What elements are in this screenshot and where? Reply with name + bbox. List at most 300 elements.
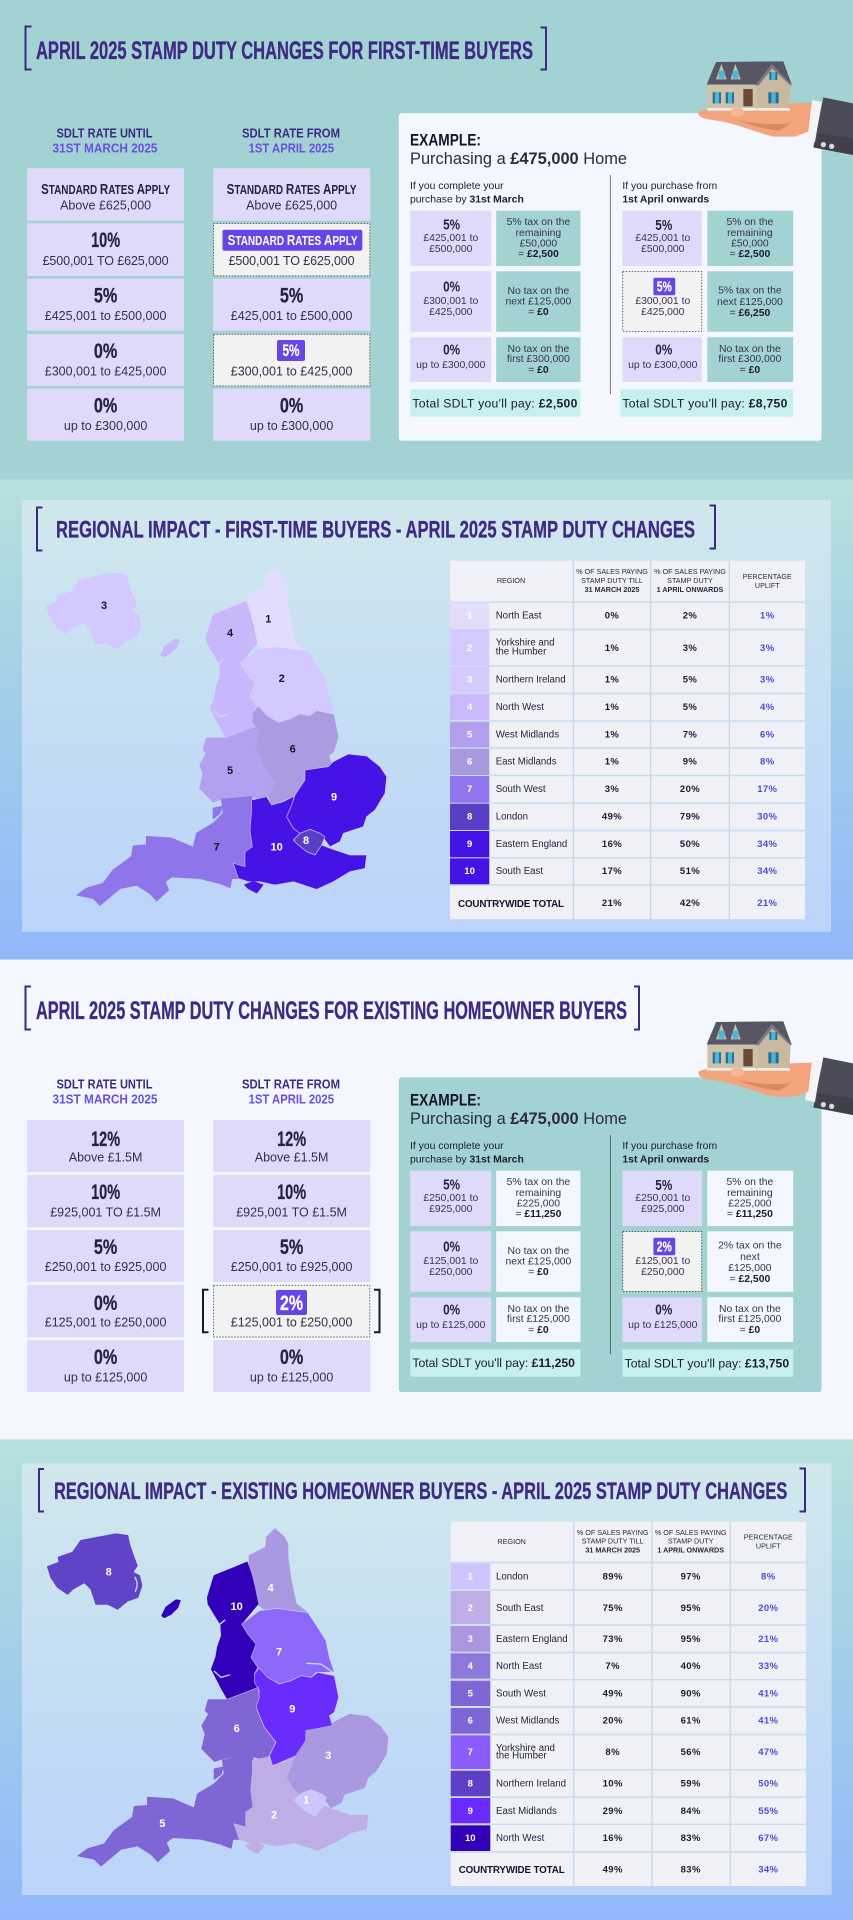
panel: worked example, existing homeowners: = £0 — [740, 1325, 760, 1336]
panel: SDLT rate from 1st April, existing homeowners: 10% — [277, 1181, 306, 1204]
map: existing homeowners by region: 10 — [231, 1601, 243, 1613]
panel: worked example, existing homeowners: = £11,250 — [515, 1209, 562, 1220]
table: first-time buyers by region: South West — [496, 784, 546, 795]
icon: hand holding house — [698, 61, 853, 155]
panel: worked example, first-time buyers: 5% — [657, 278, 672, 296]
panel: worked example, existing homeowners: £225,000 — [728, 1198, 772, 1210]
panel: worked example, existing homeowners: purchase by 31st March — [410, 1155, 524, 1166]
table: existing homeowners by region: 90% — [681, 1688, 701, 1700]
map: first-time buyers by region: 10 — [271, 842, 283, 854]
panel: worked example, existing homeowners: No tax on the — [507, 1246, 570, 1257]
table: first-time buyers by region: 49% — [602, 812, 622, 822]
table: existing homeowners by region: 7% — [605, 1661, 620, 1672]
table: existing homeowners by region: 9 — [468, 1806, 473, 1817]
panel: worked example, first-time buyers: next £125,000 — [717, 297, 783, 308]
table: first-time buyers by region: 2% — [683, 610, 697, 622]
panel: worked example, existing homeowners: £925,000 — [641, 1204, 685, 1215]
map: first-time buyers by region: 3 — [101, 600, 107, 612]
panel: worked example, first-time buyers: remaining — [727, 228, 773, 239]
panel: worked example, existing homeowners: up to £125,000 — [628, 1320, 698, 1331]
section background: first-time buyers — [0, 0, 853, 480]
panel: SDLT rate until 31st March, first-time buyers: £425,001 to £500,000 — [45, 309, 166, 323]
panel: worked example, existing homeowners: first £125,000 — [718, 1314, 782, 1325]
panel: SDLT rate from 1st April, first-time buyers: STANDARD RATES APPLY — [228, 232, 358, 249]
table: first-time buyers by region: 50% — [680, 839, 700, 850]
table: existing homeowners by region: 10% — [603, 1778, 623, 1790]
panel: worked example, first-time buyers: next £125,000 — [505, 296, 572, 308]
table: first-time buyers by region: East Midlands — [496, 756, 557, 768]
panel: SDLT rate from 1st April, first-time buyers: SDLT RATE FROM — [242, 125, 340, 140]
table: existing homeowners by region: 47% — [758, 1747, 779, 1758]
table: first-time buyers by region: 79% — [680, 812, 700, 822]
panel: worked example, existing homeowners: 1st April onwards — [622, 1155, 709, 1166]
panel: worked example, first-time buyers: Total SDLT you'll pay: £8,750 — [622, 396, 788, 410]
panel: SDLT rate until 31st March, existing homeowners: 5% — [94, 1236, 118, 1259]
panel: worked example, first-time buyers: £50,000 — [731, 238, 769, 250]
highlight chip: 2 percent — [276, 1290, 307, 1315]
section background: regional impact existing homeowners — [0, 1440, 853, 1920]
panel: worked example, existing homeowners: remaining — [516, 1188, 561, 1199]
table: first-time buyers by region: North West — [496, 702, 544, 713]
panel: worked example, existing homeowners: 5% on the — [727, 1177, 774, 1188]
heading: regional impact first-time buyers — [37, 506, 715, 550]
table: existing homeowners by region: 34% — [758, 1864, 779, 1876]
table: first-time buyers by region: 17% — [757, 784, 778, 795]
table: existing homeowners by region: 20% — [758, 1603, 779, 1614]
table: first-time buyers by region: 6% — [760, 730, 775, 740]
table: first-time buyers by region: South East — [496, 866, 543, 877]
table: existing homeowners by region: 41% — [758, 1688, 779, 1700]
panel: SDLT rate from 1st April, existing homeowners: 5% — [280, 1236, 304, 1259]
table: first-time buyers by region: 1% — [605, 674, 619, 686]
panel: worked example, existing homeowners: 0% — [443, 1238, 460, 1255]
table: first-time buyers by region: 34% — [757, 866, 778, 877]
panel: SDLT rate from 1st April, existing homeowners: £125,001 to £250,000 — [231, 1316, 352, 1330]
table: existing homeowners by region: 59% — [681, 1778, 701, 1790]
panel: worked example, first-time buyers: 0% — [655, 341, 672, 358]
map: first-time buyers by region: 4 — [227, 627, 234, 639]
panel: SDLT rate from 1st April, existing homeowners: £250,001 to £925,000 — [231, 1260, 352, 1274]
panel: SDLT rate until 31st March, existing homeowners: £125,001 to £250,000 — [45, 1316, 166, 1330]
panel: SDLT rate until 31st March, existing homeowners — [27, 1077, 184, 1392]
panel: regional impact first-time buyers — [22, 500, 831, 932]
panel: SDLT rate until 31st March, first-time buyers: SDLT RATE UNTIL — [56, 125, 153, 140]
panel: worked example, existing homeowners: up to £125,000 — [416, 1320, 486, 1331]
table: first-time buyers by region: Northern Ireland — [496, 674, 566, 686]
table: existing homeowners by region: 29% — [603, 1806, 623, 1817]
panel: worked example, existing homeowners: No tax on the — [719, 1304, 781, 1315]
table: first-time buyers by region — [450, 561, 805, 919]
table: first-time buyers by region: 30% — [757, 812, 778, 822]
panel: worked example, existing homeowners: first £125,000 — [507, 1314, 570, 1325]
panel: worked example, existing homeowners — [399, 1077, 822, 1392]
panel: SDLT rate from 1st April, existing homeowners: SDLT RATE FROM — [242, 1077, 340, 1092]
panel: worked example, existing homeowners: £250,001 to — [423, 1193, 478, 1204]
table: first-time buyers by region: 21% — [602, 898, 622, 909]
table: first-time buyers by region: 34% — [757, 839, 778, 850]
panel: worked example, existing homeowners: Total SDLT you'll pay: £13,750 — [625, 1356, 789, 1370]
map: existing homeowners by region: 1 — [303, 1795, 309, 1807]
table: existing homeowners by region: South East — [496, 1603, 544, 1614]
panel: SDLT rate from 1st April, first-time buyers: £300,001 to £425,000 — [231, 364, 352, 378]
panel: worked example, first-time buyers: first £300,000 — [718, 354, 782, 365]
panel: worked example, existing homeowners: 0% — [655, 1301, 672, 1318]
panel: worked example, existing homeowners: 5% — [443, 1176, 460, 1193]
panel: worked example, first-time buyers: first £300,000 — [507, 354, 570, 365]
table: existing homeowners by region: 97% — [681, 1572, 701, 1582]
map: existing homeowners by region: 7 — [276, 1646, 282, 1658]
table: existing homeowners by region: 7 — [468, 1747, 473, 1758]
table: first-time buyers by region: 1% — [605, 756, 619, 768]
panel: SDLT rate until 31st March, existing homeowners: 10% — [91, 1181, 120, 1204]
table: first-time buyers by region: 42% — [680, 898, 700, 909]
table: existing homeowners by region: 4 — [468, 1661, 474, 1672]
highlight chip: example 5 percent — [653, 278, 675, 295]
panel: SDLT rate from 1st April, first-time buyers: STANDARD RATES APPLY — [227, 181, 357, 198]
section background: regional impact first-time buyers — [0, 480, 853, 960]
map: first-time buyers by region — [47, 568, 387, 905]
highlight chip: 5 percent — [277, 340, 305, 361]
map: first-time buyers by region: 2 — [279, 673, 285, 685]
panel: SDLT rate from 1st April, existing homeowners: 12% — [277, 1128, 306, 1151]
panel: SDLT rate until 31st March, existing homeowners: 12% — [91, 1128, 120, 1151]
table: first-time buyers by region: London — [496, 812, 528, 822]
panel: worked example, first-time buyers: = £2,500 — [730, 249, 770, 260]
table: first-time buyers by region: 3% — [760, 643, 775, 654]
table: existing homeowners by region: North West — [496, 1833, 545, 1844]
table: first-time buyers by region: PERCENTAGE — [743, 572, 792, 581]
panel: worked example, existing homeowners: If you complete your — [410, 1141, 504, 1152]
panel: worked example, first-time buyers: = £6,250 — [730, 308, 770, 319]
panel: worked example, first-time buyers: Total SDLT you'll pay: £2,500 — [412, 396, 578, 410]
panel: SDLT rate from 1st April, first-time buyers: Above £625,000 — [246, 198, 337, 212]
panel: worked example, first-time buyers: remaining — [516, 228, 561, 239]
panel: worked example, first-time buyers: = £0 — [740, 365, 760, 376]
table: first-time buyers by region: 4 — [467, 702, 473, 713]
table: existing homeowners by region: UPLIFT — [756, 1542, 781, 1550]
table: existing homeowners by region: the Humber — [496, 1751, 547, 1762]
panel: SDLT rate from 1st April, first-time buyers: 5% — [280, 284, 304, 308]
panel: worked example, first-time buyers: £500,000 — [641, 244, 685, 255]
table: first-time buyers by region: STAMP DUTY TILL — [581, 576, 643, 585]
panel: SDLT rate from 1st April, existing homeowners: Above £1.5M — [255, 1150, 328, 1164]
table: first-time buyers by region: Eastern England — [496, 839, 567, 850]
panel: worked example, existing homeowners: 5% tax on the — [507, 1177, 570, 1188]
panel: worked example, existing homeowners: £125,001 to — [423, 1256, 478, 1267]
table: existing homeowners by region: 2 — [468, 1603, 473, 1614]
table: existing homeowners by region: 95% — [681, 1634, 701, 1645]
panel: worked example, first-time buyers: If you complete your — [410, 181, 504, 192]
table: existing homeowners by region: 84% — [681, 1806, 701, 1817]
map: existing homeowners by region: 6 — [234, 1723, 240, 1735]
map: first-time buyers by region: 9 — [331, 792, 337, 804]
panel: worked example, first-time buyers: If you purchase from — [622, 181, 717, 192]
panel: SDLT rate until 31st March, existing homeowners: up to £125,000 — [64, 1370, 147, 1384]
panel: worked example, existing homeowners: next — [740, 1252, 760, 1263]
panel: SDLT rate from 1st April, existing homeowners: 2% — [280, 1292, 303, 1315]
panel: worked example, first-time buyers: No tax on the — [507, 344, 570, 355]
panel: worked example, first-time buyers: 5% tax on the — [507, 217, 570, 228]
table: existing homeowners by region: STAMP DUTY — [668, 1536, 714, 1546]
table: existing homeowners by region: Eastern England — [496, 1634, 568, 1645]
table: first-time buyers by region: North East — [496, 610, 542, 622]
panel: worked example, existing homeowners: remaining — [727, 1188, 773, 1199]
panel: worked example, existing homeowners: EXAMPLE: — [410, 1090, 481, 1109]
map: existing homeowners by region: 3 — [325, 1750, 331, 1762]
panel: worked example, first-time buyers: 5% — [443, 216, 460, 233]
table: existing homeowners by region: 20% — [603, 1716, 623, 1726]
panel: SDLT rate until 31st March, existing homeowners: SDLT RATE UNTIL — [56, 1077, 153, 1092]
panel: SDLT rate until 31st March, first-time buyers: 31ST MARCH 2025 — [52, 140, 158, 155]
table: existing homeowners by region: 16% — [603, 1833, 623, 1844]
panel: SDLT rate from 1st April, existing homeowners: up to £125,000 — [250, 1370, 333, 1384]
table: first-time buyers by region: 16% — [602, 839, 622, 850]
panel: worked example, first-time buyers: purchase by 31st March — [410, 195, 524, 206]
panel: SDLT rate from 1st April, first-time buyers: 1ST APRIL 2025 — [249, 140, 334, 155]
table: first-time buyers by region: 1% — [605, 643, 619, 654]
panel: SDLT rate from 1st April, existing homeowners: 1ST APRIL 2025 — [249, 1092, 334, 1107]
map: first-time buyers by region: 6 — [290, 743, 296, 755]
panel: worked example, first-time buyers: £425,000 — [641, 307, 685, 318]
map: first-time buyers by region: 1 — [265, 613, 271, 625]
table: existing homeowners by region: 73% — [603, 1634, 623, 1645]
panel: worked example, first-time buyers: £50,000 — [520, 238, 557, 250]
table: first-time buyers by region: 6 — [467, 756, 472, 768]
panel: SDLT rate until 31st March, existing homeowners: 0% — [94, 1346, 118, 1369]
panel: worked example, existing homeowners: No tax on the — [507, 1304, 570, 1315]
table: existing homeowners by region: 49% — [603, 1864, 623, 1876]
table: first-time buyers by region: 4% — [760, 702, 775, 713]
table: first-time buyers by region: 31 MARCH 2025 — [585, 585, 639, 594]
map: first-time buyers by region: 8 — [303, 835, 309, 847]
panel: SDLT rate from 1st April, first-time buyers: 5% — [282, 341, 300, 360]
table: existing homeowners by region: 41% — [758, 1716, 779, 1726]
panel: worked example, existing homeowners: 2% — [657, 1238, 672, 1256]
table: first-time buyers by region: 1 — [467, 610, 473, 622]
table: first-time buyers by region: 8% — [760, 756, 775, 768]
panel: worked example, first-time buyers: 0% — [443, 341, 460, 358]
table: first-time buyers by region: 2 — [467, 643, 472, 654]
panel: worked example, first-time buyers: up to £300,000 — [416, 360, 486, 371]
table: first-time buyers by region: % OF SALES PAYING — [576, 567, 648, 576]
panel: SDLT rate from 1st April, first-time buyers: £425,001 to £500,000 — [231, 309, 352, 323]
table: first-time buyers by region: 3% — [683, 643, 697, 654]
panel: worked example, first-time buyers: EXAMPLE: — [410, 130, 481, 149]
heading: first-time buyers: APRIL 2025 STAMP DUTY CHANGES FOR FIRST-TIME BUYERS — [36, 37, 533, 65]
panel: worked example, first-time buyers: £425,000 — [429, 307, 473, 318]
panel: worked example, first-time buyers: 5% on the — [727, 217, 774, 228]
highlight chip: standard rates apply — [222, 230, 362, 251]
map: first-time buyers by region: 5 — [227, 765, 233, 777]
panel: worked example, existing homeowners: = £0 — [528, 1267, 549, 1278]
panel: worked example, first-time buyers: £425,001 to — [423, 233, 478, 244]
table: first-time buyers by region: 3% — [760, 674, 775, 686]
table: existing homeowners by region: Northern Ireland — [496, 1778, 566, 1790]
table: existing homeowners by region: West Midlands — [496, 1716, 560, 1726]
table: first-time buyers by region: 1% — [760, 610, 775, 622]
panel: worked example, first-time buyers: 5% tax on the — [718, 286, 782, 296]
panel: worked example, first-time buyers: No tax on the — [507, 286, 570, 297]
table: existing homeowners by region: 1 APRIL ONWARDS — [657, 1546, 724, 1554]
table: existing homeowners by region: 50% — [758, 1778, 779, 1790]
panel: SDLT rate until 31st March, first-time buyers: up to £300,000 — [64, 419, 147, 433]
table: existing homeowners by region: COUNTRYWIDE TOTAL — [459, 1865, 565, 1876]
highlight chip: example 2 percent — [653, 1238, 675, 1255]
table: first-time buyers by region: 10 — [464, 866, 475, 877]
heading: first-time buyers — [26, 26, 546, 70]
table: first-time buyers by region: 8 — [467, 812, 472, 822]
panel: worked example, existing homeowners: = £11,250 — [727, 1209, 773, 1220]
table: first-time buyers by region: 7% — [683, 730, 697, 740]
panel: SDLT rate until 31st March, existing homeowners: Above £1.5M — [69, 1150, 142, 1164]
table: existing homeowners by region: 31 MARCH 2025 — [585, 1546, 640, 1554]
table: existing homeowners by region: 49% — [603, 1688, 623, 1700]
table: first-time buyers by region: STAMP DUTY — [667, 576, 713, 585]
panel: worked example, existing homeowners: next £125,000 — [505, 1256, 572, 1268]
table: existing homeowners by region: North East — [496, 1661, 542, 1672]
table: existing homeowners by region: 89% — [603, 1572, 623, 1582]
panel: worked example, first-time buyers: 0% — [443, 278, 460, 295]
table: existing homeowners by region: 8% — [605, 1747, 620, 1758]
table: existing homeowners by region: STAMP DUTY TILL — [582, 1536, 644, 1546]
table: first-time buyers by region: 1% — [605, 730, 619, 740]
panel: SDLT rate until 31st March, first-time buyers: 0% — [94, 394, 118, 418]
heading: regional impact existing homeowners — [39, 1468, 805, 1512]
section background: existing homeowner buyers — [0, 960, 853, 1440]
table: first-time buyers by region: West Midlands — [496, 730, 559, 740]
table: first-time buyers by region: 7 — [467, 784, 472, 795]
table: existing homeowners by region: 8% — [761, 1572, 776, 1582]
table: existing homeowners by region: % OF SALES PAYING — [655, 1528, 727, 1537]
table: existing homeowners by region: 55% — [758, 1806, 779, 1817]
table: first-time buyers by region: 5 — [467, 730, 473, 740]
panel: worked example, existing homeowners: £250,000 — [641, 1267, 685, 1278]
panel: worked example, first-time buyers: = £2,500 — [518, 249, 559, 260]
table: first-time buyers by region: 17% — [602, 866, 622, 877]
panel: worked example, first-time buyers: £300,001 to — [423, 296, 478, 307]
panel: SDLT rate until 31st March, first-time buyers: 5% — [94, 284, 118, 308]
panel: worked example, first-time buyers: £500,000 — [429, 244, 473, 255]
panel: worked example, existing homeowners: Total SDLT you'll pay: £11,250 — [412, 1356, 575, 1370]
table: existing homeowners by region: 75% — [603, 1603, 623, 1614]
panel: SDLT rate until 31st March, first-time buyers: 0% — [94, 340, 118, 363]
panel: SDLT rate from 1st April, first-time buyers: up to £300,000 — [250, 419, 333, 433]
table: first-time buyers by region: 1 APRIL ONWARDS — [657, 585, 724, 594]
panel: worked example, existing homeowners: £125,001 to — [635, 1256, 690, 1267]
table: first-time buyers by region: 1% — [605, 702, 619, 713]
panel: SDLT rate until 31st March, existing homeowners: £925,001 TO £1.5M — [50, 1206, 161, 1220]
table: existing homeowners by region: 83% — [681, 1864, 701, 1876]
table: existing homeowners by region: 56% — [681, 1747, 701, 1758]
map: existing homeowners by region: 4 — [268, 1582, 275, 1594]
table: first-time buyers by region: 0% — [605, 610, 619, 622]
panel: SDLT rate until 31st March, existing homeowners: £250,001 to £925,000 — [45, 1260, 166, 1274]
panel: SDLT rate until 31st March, first-time buyers: 10% — [91, 229, 120, 252]
panel: worked example, existing homeowners: 2% tax on the — [718, 1240, 782, 1252]
table: existing homeowners by region: % OF SALES PAYING — [577, 1528, 649, 1537]
panel: SDLT rate from 1st April, existing homeowners: £925,001 TO £1.5M — [236, 1206, 347, 1220]
panel: SDLT rate until 31st March, first-time buyers: £500,001 TO £625,000 — [43, 254, 169, 268]
map: existing homeowners by region: 9 — [289, 1704, 295, 1716]
panel: worked example, first-time buyers: = £0 — [528, 365, 549, 376]
panel: worked example, existing homeowners: £925,000 — [429, 1204, 473, 1215]
table: first-time buyers by region: 3 — [467, 674, 472, 686]
table: first-time buyers by region: COUNTRYWIDE TOTAL — [458, 899, 564, 910]
panel: SDLT rate until 31st March, existing homeowners: 31ST MARCH 2025 — [52, 1092, 158, 1107]
table: existing homeowners by region: Yorkshire and — [496, 1743, 555, 1754]
table: existing homeowners by region: London — [496, 1572, 528, 1582]
table: first-time buyers by region: Yorkshire and — [496, 638, 555, 649]
panel: worked example, first-time buyers: = £0 — [528, 307, 549, 318]
table: existing homeowners by region: 40% — [681, 1661, 701, 1672]
panel: worked example, first-time buyers: £425,001 to — [635, 233, 690, 244]
panel: worked example, existing homeowners: If you purchase from — [622, 1141, 717, 1152]
table: existing homeowners by region: 21% — [758, 1634, 779, 1645]
table: existing homeowners by region: 33% — [758, 1661, 779, 1672]
panel: SDLT rate from 1st April, first-time buyers — [213, 125, 370, 441]
map: existing homeowners by region: 8 — [106, 1566, 112, 1578]
panel: worked example, existing homeowners: = £0 — [528, 1325, 549, 1336]
panel: SDLT rate until 31st March, first-time buyers: £300,001 to £425,000 — [45, 364, 166, 378]
icon: hand holding house, second — [698, 1021, 853, 1115]
table: existing homeowners by region: 1 — [468, 1572, 474, 1582]
panel: SDLT rate until 31st March, first-time buyers: STANDARD RATES APPLY — [41, 181, 170, 198]
table: first-time buyers by region: 9% — [683, 756, 697, 768]
table: first-time buyers by region: 20% — [680, 784, 700, 795]
table: existing homeowners by region: 10 — [465, 1833, 476, 1844]
table: existing homeowners by region: PERCENTAGE — [744, 1532, 793, 1542]
panel: worked example, existing homeowners: £250,001 to — [635, 1193, 690, 1204]
table: first-time buyers by region: REGION — [497, 576, 525, 585]
panel: SDLT rate from 1st April, existing homeowners: 0% — [280, 1346, 304, 1369]
table: existing homeowners by region: 83% — [681, 1833, 701, 1844]
table: existing homeowners by region: 3 — [468, 1634, 473, 1645]
panel: SDLT rate from 1st April, first-time buyers: 0% — [280, 394, 304, 418]
panel: SDLT rate from 1st April, existing homeowners — [203, 1077, 380, 1392]
table: existing homeowners by region: REGION — [498, 1537, 526, 1546]
panel: worked example, first-time buyers — [399, 113, 822, 441]
map: first-time buyers by region: 7 — [214, 842, 220, 854]
table: first-time buyers by region: 9 — [467, 839, 472, 850]
panel: worked example, existing homeowners: £225,000 — [517, 1198, 560, 1210]
panel: worked example, first-time buyers: up to £300,000 — [628, 360, 698, 371]
panel: worked example, existing homeowners: 0% — [443, 1301, 460, 1318]
panel: SDLT rate until 31st March, existing homeowners: 0% — [94, 1292, 118, 1315]
table: first-time buyers by region: 3% — [605, 784, 619, 795]
table: first-time buyers by region: 21% — [757, 898, 778, 909]
table: first-time buyers by region: UPLIFT — [755, 581, 780, 590]
table: first-time buyers by region: 5% — [683, 702, 697, 713]
table: first-time buyers by region: % OF SALES PAYING — [654, 567, 726, 576]
table: existing homeowners by region — [451, 1522, 806, 1886]
panel: worked example, first-time buyers: 1st April onwards — [622, 195, 709, 206]
panel: SDLT rate until 31st March, first-time buyers — [27, 125, 184, 441]
heading: existing homeowner buyers — [26, 986, 639, 1030]
table: existing homeowners by region: 61% — [681, 1716, 701, 1726]
panel: worked example, first-time buyers: No tax on the — [719, 344, 781, 355]
table: existing homeowners by region: 6 — [468, 1716, 473, 1726]
panel: worked example, existing homeowners: = £2,500 — [730, 1274, 770, 1285]
table: existing homeowners by region: 67% — [758, 1833, 779, 1844]
table: existing homeowners by region: 95% — [681, 1603, 701, 1614]
map: existing homeowners by region: 2 — [271, 1809, 277, 1821]
table: first-time buyers by region: 51% — [680, 866, 700, 877]
panel: SDLT rate until 31st March, first-time buyers: Above £625,000 — [60, 198, 151, 212]
table: existing homeowners by region: East Midlands — [496, 1806, 557, 1817]
table: existing homeowners by region: 5 — [468, 1688, 474, 1700]
panel: worked example, existing homeowners: Purchasing a £475,000 Home — [410, 1110, 627, 1128]
table: first-time buyers by region: 5% — [683, 674, 697, 686]
